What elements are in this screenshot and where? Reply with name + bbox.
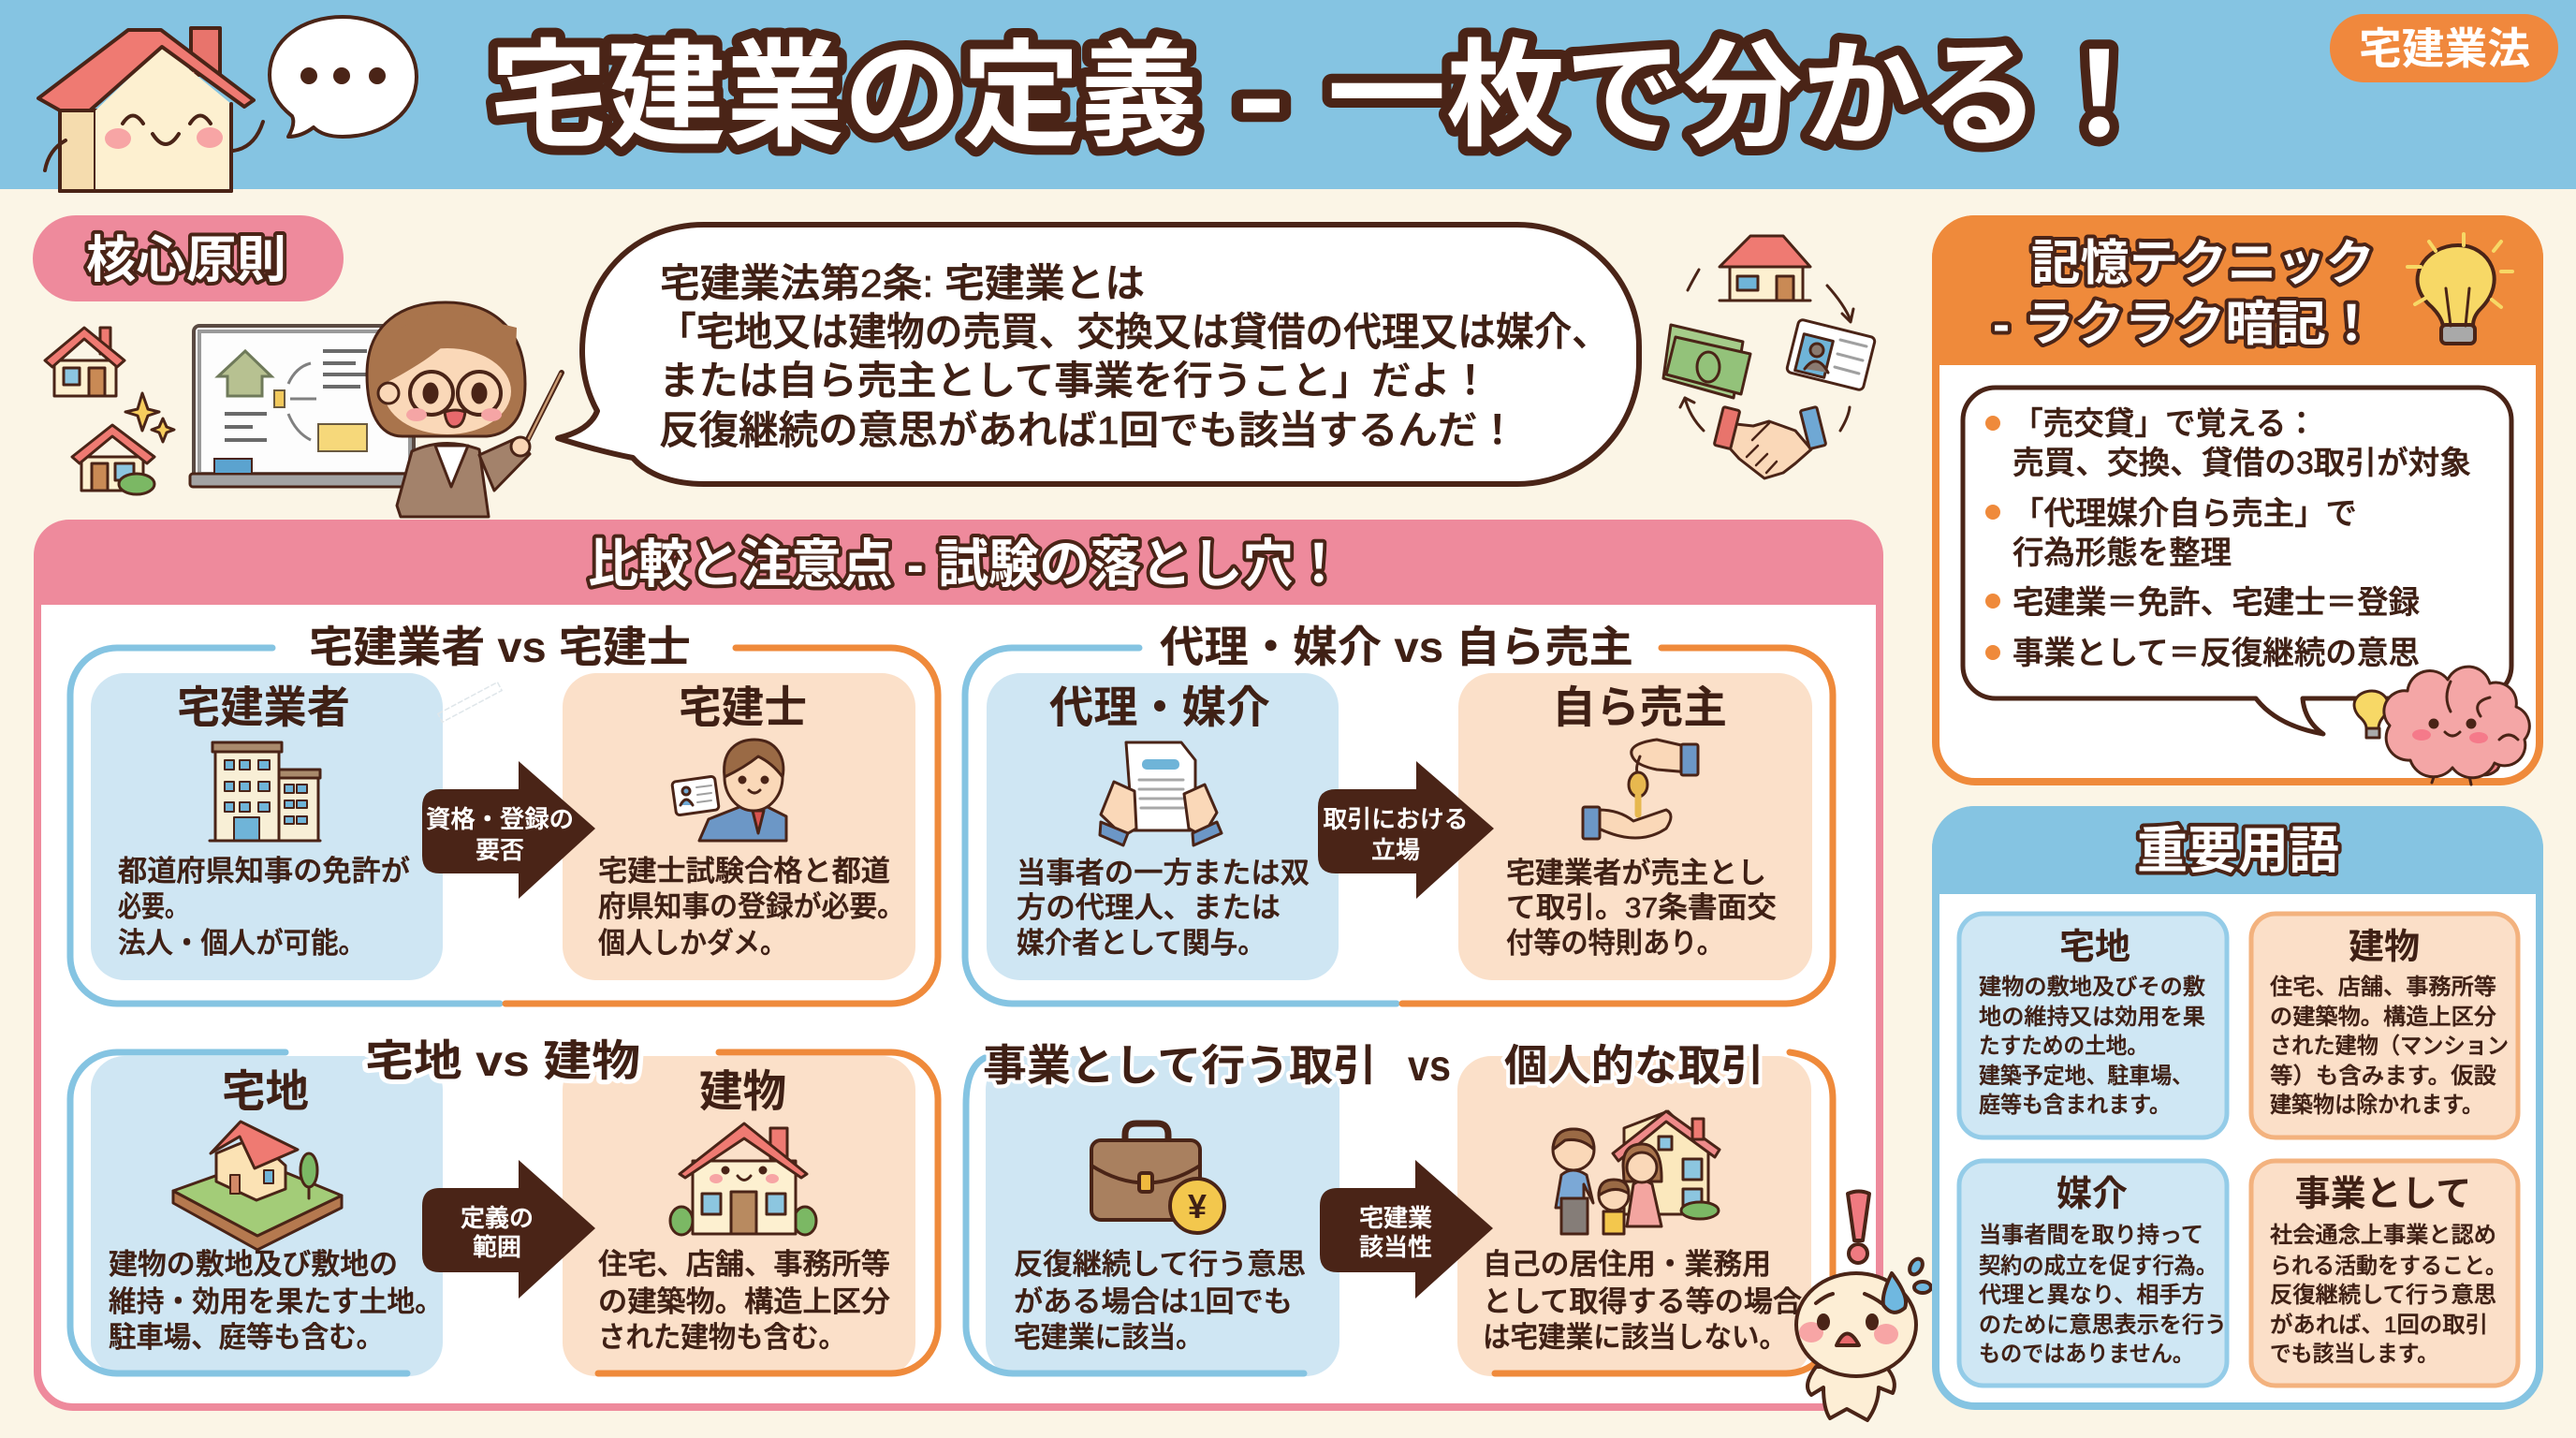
comparison: 代理・媒介 vs 自ら売主: 当事者の一方または双: [1017, 857, 1310, 889]
speech bubble: definition: または自ら売主として事業を行うこと」だよ！: [659, 359, 1490, 403]
speech bubble: tips: 「売交貸」で覚える：: [2012, 406, 2317, 442]
comparison: 事業 vs 個人: vs: [1408, 1041, 1451, 1090]
comparison: 事業 vs 個人: として取得する等の場合: [1483, 1285, 1802, 1318]
term: 事業として: 反復継続して行う意思: [2270, 1283, 2496, 1308]
icon: small houses with sparkles: [45, 328, 174, 494]
speech bubble: definition: 宅建業法第2条: 宅建業とは: [660, 261, 1145, 305]
speech bubble: tips: 宅建業＝免許、宅建士＝登録: [2012, 585, 2420, 621]
badge: 核心原則: [33, 215, 344, 301]
term: 媒介: 契約の成立を促す行為。: [1979, 1254, 2217, 1279]
icon: house on land plot: [173, 1122, 342, 1250]
term: 建物: 住宅、店舗、事務所等: [2270, 975, 2496, 1000]
comparison: 宅地 vs 建物: [70, 1036, 938, 1376]
arrow: 取引における立場: [1318, 761, 1494, 899]
comparison: 事業 vs 個人: [966, 1041, 1833, 1376]
term: 事業として: 事業として: [2295, 1175, 2471, 1214]
term: 事業として: でも該当します。: [2270, 1342, 2438, 1367]
title: 一枚で分かる！: [1327, 32, 2159, 161]
arrow: 取引における立場: 取引における: [1324, 805, 1468, 833]
panel: comparison: [34, 520, 1883, 1407]
comparison: 代理・媒介 vs 自ら売主: 方の代理人、または: [1017, 891, 1281, 924]
tag: 宅建業法: [2330, 14, 2558, 82]
term: 宅地: 庭等も含まれます。: [1979, 1093, 2171, 1118]
icon: key handover: [1583, 740, 1698, 839]
comparison: 事業 vs 個人: 宅建業に該当。: [1014, 1321, 1203, 1354]
speech bubble: tips: [1963, 388, 2511, 734]
comparison: 事業 vs 個人: 自己の居住用・業務用: [1483, 1248, 1771, 1281]
title: -: [1237, 32, 1285, 161]
title: 宅建業の定義: [490, 32, 1198, 161]
panel heading: 比較と注意点 - 試験の落とし穴！: [588, 535, 1344, 594]
comparison: 代理・媒介 vs 自ら売主: 宅建業者が売主とし: [1506, 857, 1766, 889]
term: 建物: された建物（マンション: [2270, 1034, 2509, 1059]
comparison: 宅建業者 vs 宅建士: 法人・個人が可能。: [118, 927, 366, 960]
icon: briefcase with yen coin: [1091, 1123, 1224, 1233]
comparison: 事業 vs 個人: 個人的な取引: [1504, 1041, 1764, 1090]
term: 事業として: られる活動をすること。: [2270, 1254, 2507, 1279]
comparison: 宅地 vs 建物: 住宅、店舗、事務所等: [598, 1248, 890, 1281]
term: 宅地: 建物の敷地及びその敷: [1979, 975, 2205, 1000]
comparison: 宅地 vs 建物: の建築物。構造上区分: [598, 1285, 890, 1318]
comparison: 代理・媒介 vs 自ら売主: 代理・媒介: [1049, 682, 1270, 732]
term: 建物: 建物: [2349, 928, 2420, 967]
term: 建物: 等）も含みます。仮設: [2270, 1064, 2496, 1089]
comparison: 宅地 vs 建物: 宅地: [222, 1066, 309, 1116]
comparison: 宅地 vs 建物: 建物: [699, 1066, 786, 1116]
arrow: 取引における立場: 立場: [1371, 836, 1420, 864]
comparison: 宅建業者 vs 宅建士: 宅建業者: [177, 682, 350, 732]
term: 媒介: [1959, 1161, 2227, 1386]
arrow: 定義の範囲: [422, 1160, 595, 1299]
comparison: 代理・媒介 vs 自ら売主: [965, 623, 1833, 1004]
comparison: 宅建業者 vs 宅建士: 宅建士: [679, 682, 807, 732]
comparison: 宅建業者 vs 宅建士: 個人しかダメ。: [598, 927, 787, 960]
arrow: 宅建業該当性: [1320, 1160, 1493, 1299]
arrow: 宅建業該当性: 該当性: [1359, 1233, 1432, 1261]
title: [490, 32, 2159, 161]
term: 宅地: 宅地: [2059, 928, 2130, 967]
icon: licensed agent with ID: [672, 740, 786, 841]
icon: smiling house: [670, 1123, 816, 1235]
term: 宅地: 建築予定地、駐車場、: [1979, 1064, 2193, 1089]
term: 媒介: 代理と異なり、相手方: [1979, 1283, 2204, 1308]
panel: key terms: [1932, 806, 2543, 1406]
panel: memory technique: [1932, 215, 2543, 785]
icon: light bulb: [2408, 234, 2512, 344]
icon: whiteboard: [190, 326, 415, 487]
term: 事業として: [2251, 1161, 2518, 1386]
arrow: 定義の範囲: 定義の: [461, 1204, 534, 1232]
comparison: 宅建業者 vs 宅建士: 必要。: [118, 890, 188, 923]
term: 媒介: ものではありません。: [1979, 1342, 2194, 1367]
term: 建物: [2251, 914, 2518, 1137]
header band: [0, 0, 2576, 189]
speech bubble: tips: 行為形態を整理: [2012, 536, 2232, 571]
term: 建物: の建築物。構造上区分: [2270, 1005, 2496, 1030]
icon: briefcase with yen coin: ¥: [1188, 1187, 1207, 1225]
heading: [1993, 237, 2377, 352]
icon: teacher character: [367, 302, 562, 517]
icon: document in hands: [1100, 742, 1222, 845]
heading: - ラクラク暗記！: [1993, 298, 2377, 352]
arrow: 資格・登録の要否: 資格・登録の: [426, 805, 574, 833]
comparison: 宅地 vs 建物: 維持・効用を果たす土地。: [109, 1285, 443, 1318]
comparison: 代理・媒介 vs 自ら売主: 付等の特則あり。: [1506, 927, 1724, 960]
term: 建物: 建築物は除かれます。: [2270, 1093, 2483, 1118]
term: 事業として: 社会通念上事業と認め: [2270, 1223, 2496, 1248]
icon: office building: [210, 742, 320, 841]
icon: smiling house mascot: [38, 28, 263, 191]
comparison: 事業 vs 個人: がある場合は1回でも: [1014, 1285, 1293, 1318]
badge: 核心原則: 核心原則: [86, 232, 286, 288]
arrow: 宅建業該当性: 宅建業: [1359, 1204, 1432, 1232]
speech bubble: tips: 売買、交換、貸借の3取引が対象: [2012, 446, 2471, 481]
comparison: 宅地 vs 建物: 宅地 vs 建物: [365, 1036, 640, 1085]
icon: family and house: [1553, 1111, 1720, 1234]
comparison: 代理・媒介 vs 自ら売主: て取引。37条書面交: [1506, 891, 1777, 924]
comparison: 宅建業者 vs 宅建士: 府県知事の登録が必要。: [598, 890, 905, 923]
comparison: 代理・媒介 vs 自ら売主: 自ら売主: [1552, 682, 1727, 732]
comparison: 宅地 vs 建物: 建物の敷地及び敷地の: [109, 1248, 398, 1281]
comparison: 宅建業者 vs 宅建士: 都道府県知事の免許が: [118, 855, 410, 888]
comparison: 代理・媒介 vs 自ら売主: 媒介者として関与。: [1017, 927, 1266, 960]
icon: worried mascot: [1796, 1191, 1931, 1420]
tag: 宅建業法: 宅建業法: [2359, 24, 2530, 73]
speech bubble: definition: 「宅地又は建物の売買、交換又は貸借の代理又は媒介、: [658, 310, 1610, 354]
comparison: 事業 vs 個人: 事業として行う取引: [983, 1041, 1377, 1090]
speech bubble: definition: [558, 225, 1639, 484]
comparison: 宅建業者 vs 宅建士: [70, 623, 938, 1004]
term: 事業として: があれば、1回の取引: [2270, 1313, 2488, 1338]
speech bubble: tips: 事業として＝反復継続の意思: [2012, 636, 2420, 671]
comparison: 代理・媒介 vs 自ら売主: 代理・媒介 vs 自ら売主: [1160, 623, 1633, 671]
heading: 記憶テクニック: [2031, 237, 2375, 291]
comparison: 事業 vs 個人: 反復継続して行う意思: [1014, 1248, 1306, 1281]
icon: speech bubble with dots: [270, 17, 417, 137]
speech bubble: definition: 反復継続の意思があれば1回でも該当するんだ！: [659, 408, 1517, 452]
arrow: 定義の範囲: 範囲: [473, 1233, 521, 1261]
arrow: 資格・登録の要否: [422, 761, 595, 899]
speech bubble: tips: 「代理媒介自ら売主」で: [2012, 496, 2357, 532]
term: 宅地: 地の維持又は効用を果: [1979, 1005, 2205, 1030]
comparison: 事業 vs 個人: は宅建業に該当しない。: [1483, 1321, 1787, 1354]
comparison: 宅建業者 vs 宅建士: 宅建士試験合格と都道: [598, 855, 890, 888]
term: 宅地: [1959, 914, 2227, 1137]
term: 媒介: 当事者間を取り持って: [1979, 1223, 2203, 1248]
icon: brain mascot with bulb: [2354, 667, 2529, 785]
term: 宅地: たすための土地。: [1979, 1034, 2148, 1059]
icon: transaction cycle: [1663, 236, 1876, 478]
term: 媒介: のために意思表示を行う: [1979, 1313, 2227, 1338]
comparison: 宅地 vs 建物: された建物も含む。: [598, 1321, 846, 1354]
arrow: 資格・登録の要否: 要否: [476, 836, 524, 864]
term: 媒介: 媒介: [2056, 1175, 2128, 1214]
comparison: 宅地 vs 建物: 駐車場、庭等も含む。: [109, 1321, 384, 1354]
comparison: 宅建業者 vs 宅建士: 宅建業者 vs 宅建士: [309, 623, 691, 671]
heading: 重要用語: [2137, 823, 2339, 879]
